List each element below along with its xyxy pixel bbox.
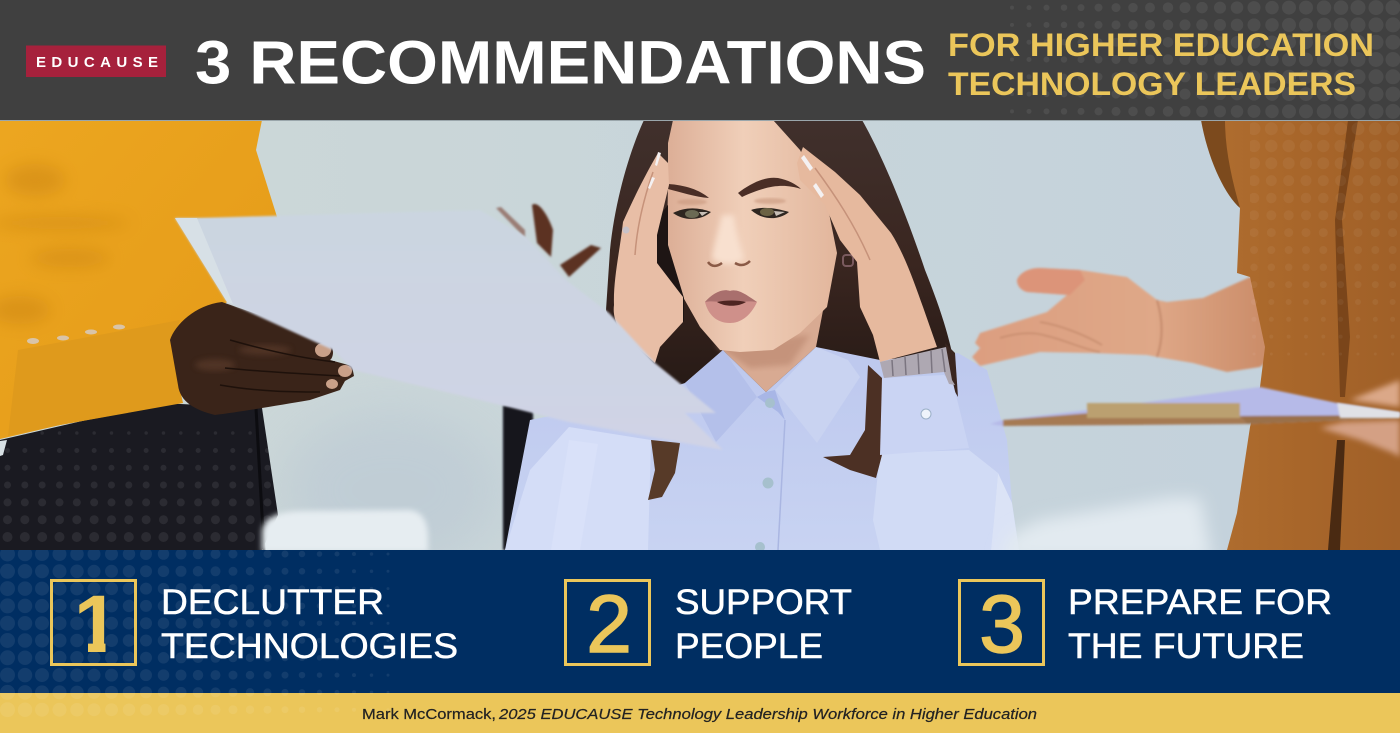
lips [705, 290, 757, 323]
hair strand over shirt left [648, 440, 680, 500]
earring [843, 255, 853, 266]
label: declutter technologies: DECLUTTER [161, 583, 384, 622]
wristwatch [880, 347, 955, 385]
ring [622, 226, 630, 234]
woman shirt [505, 347, 1019, 550]
citation footer band [0, 693, 1400, 733]
cuff button [921, 409, 931, 419]
finger crease left hand [635, 172, 653, 255]
cuff buttons [27, 324, 125, 344]
main title: 3 RECOMMENDATIONS [195, 28, 926, 98]
label: support people [675, 583, 852, 666]
label: support people: SUPPORT [675, 583, 852, 622]
neck [724, 311, 823, 392]
trouser seam [256, 408, 264, 550]
right coworker brown garment [1201, 120, 1400, 550]
right shirt collar [775, 347, 860, 443]
chin shadow [715, 335, 810, 368]
left coworker black trousers [0, 403, 278, 550]
subtitle: TECHNOLOGY LEADERS [948, 66, 1356, 102]
right coworker arm and hand [972, 268, 1275, 372]
paper in front of woman [175, 210, 723, 450]
label: prepare for the future: PREPARE FOR [1068, 583, 1332, 622]
sweater cuff [8, 320, 183, 436]
blurred cup left [262, 510, 428, 552]
paper left flap [175, 218, 233, 304]
shirt cuff [880, 375, 969, 455]
right hand on head [797, 147, 937, 362]
clipboard [990, 387, 1400, 426]
citation footer band: 2025 EDUCAUSE Technology Leadership Workforce in Higher Education [498, 707, 1037, 723]
number box 1 [52, 579, 136, 670]
garment shoulder fold [1201, 120, 1240, 208]
shirt outer fold [991, 473, 1019, 550]
fingers behind the paper [496, 204, 601, 277]
EDUCAUSE logo: EDUCAUSE [36, 54, 158, 71]
shirt placket [778, 420, 785, 550]
number box 3: 3 [979, 579, 1025, 670]
subtitle [948, 27, 1374, 102]
subtitle: FOR HIGHER EDUCATION [948, 27, 1374, 63]
nostrils [708, 261, 750, 266]
garment lower fold [1328, 440, 1345, 550]
photo background wall [0, 120, 1400, 550]
mouth opening [717, 300, 746, 306]
clipboard sheet edge [1337, 403, 1400, 418]
number box 1: 1 [74, 579, 119, 670]
label: prepare for the future [1068, 583, 1332, 666]
right eyebrow [738, 178, 801, 197]
collar stand under neck [757, 390, 785, 420]
finger creases [220, 340, 340, 392]
header band [0, 0, 1400, 121]
left shirt sleeve [505, 427, 651, 550]
wall lower shading [305, 432, 469, 535]
left coworker orange sweater [0, 120, 278, 439]
EDUCAUSE logo [26, 46, 166, 77]
recommendation 2 [566, 579, 852, 670]
face [667, 120, 837, 352]
white fingernails [648, 152, 824, 198]
citation footer band: Mark McCormack, [362, 707, 496, 723]
right shirt sleeve [873, 450, 998, 550]
navy recommendations band [0, 550, 1400, 693]
number box 3 [960, 579, 1044, 670]
left coworker dark hand [170, 302, 354, 415]
left shirt collar [685, 350, 757, 442]
left hand on head [614, 153, 683, 363]
sleeve gusset [551, 440, 598, 550]
left eyebrow [668, 184, 709, 198]
right eye [751, 208, 789, 218]
recommendation 3 [960, 579, 1332, 670]
number box 2: 2 [586, 579, 632, 670]
finger crease right hand [815, 168, 870, 260]
label: prepare for the future: THE FUTURE [1068, 627, 1304, 666]
photo: stressed woman surrounded by coworkers [0, 120, 1400, 570]
left eye [673, 208, 711, 219]
label: declutter technologies [161, 583, 458, 666]
upper eyelid shadows [677, 198, 786, 205]
upper lip [705, 290, 757, 303]
recommendation 1 [52, 579, 458, 670]
label: support people: PEOPLE [675, 627, 823, 666]
label: declutter technologies: TECHNOLOGIES [161, 627, 458, 666]
shadow beside face [657, 205, 684, 322]
dark chair back [503, 405, 533, 550]
nose highlight [712, 215, 744, 264]
lower right hand [1320, 380, 1400, 457]
hair strand beside watch [945, 343, 958, 397]
sliver of wall under sweater [0, 440, 7, 456]
right hair strand over shirt [823, 365, 882, 478]
blurred objects right [1000, 498, 1212, 560]
fingernails [315, 343, 352, 389]
number box 2 [566, 579, 650, 670]
sweater fold shadows [0, 164, 101, 323]
woman hair back [606, 120, 958, 405]
shirt buttons [755, 398, 775, 552]
knuckle highlights [195, 345, 291, 371]
garment seam [1335, 120, 1358, 397]
